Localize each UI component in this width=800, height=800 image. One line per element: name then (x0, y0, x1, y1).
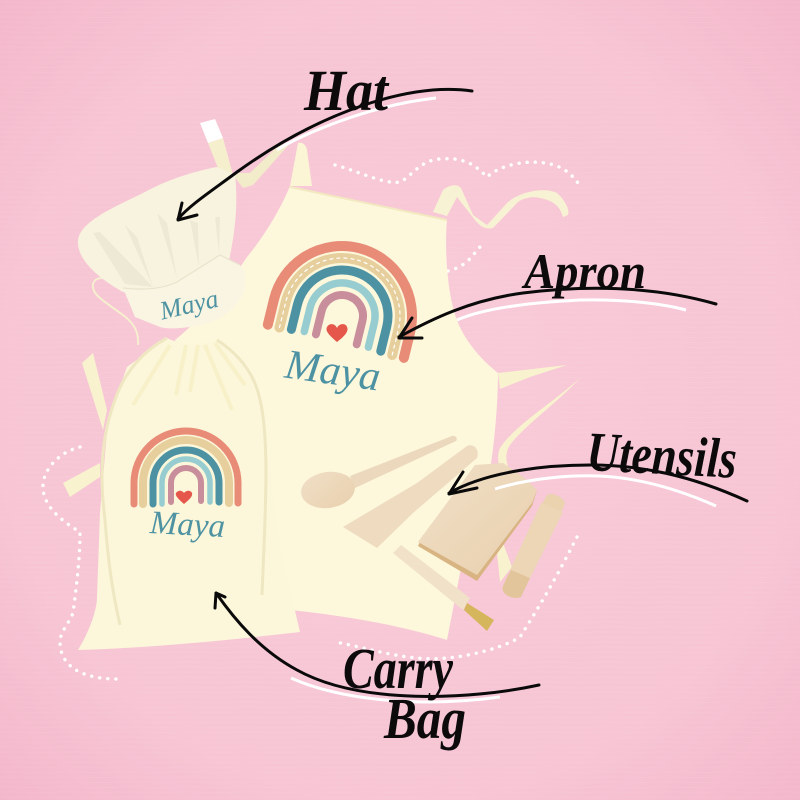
label: Hat: Hat (303, 58, 390, 123)
hat band (123, 255, 245, 328)
arrow and label: carry bag (215, 593, 539, 751)
apron lower ties (498, 365, 567, 389)
label: Bag: Bag (383, 686, 466, 751)
bag body (78, 338, 300, 650)
hat strap (93, 119, 293, 345)
dotted decorative paths (43, 159, 578, 679)
white shadow (277, 98, 436, 150)
pastry brush (393, 545, 494, 631)
bag ties (82, 353, 107, 430)
label: Carry: Carry (343, 636, 453, 701)
icon: heart (326, 324, 348, 342)
bag rainbow (134, 431, 238, 504)
apron name: Maya (281, 342, 383, 401)
arrow and label: hat (178, 58, 472, 220)
apron rainbow (268, 231, 427, 358)
apron upper tie (433, 185, 568, 229)
label: Apron: Apron (521, 243, 646, 299)
apron body (175, 186, 498, 640)
utensils (299, 436, 565, 631)
bag name: Maya (148, 505, 226, 545)
arrow and label: apron (399, 243, 716, 338)
hat puff (78, 167, 236, 300)
spatula (343, 445, 478, 548)
label: Utensils: Utensils (585, 421, 738, 491)
hat name: Maya (156, 284, 221, 326)
icon: bag heart (176, 491, 192, 504)
carry bag (63, 338, 300, 650)
hat pleats (93, 213, 220, 287)
gathered folds (133, 343, 245, 410)
scraper board (418, 463, 537, 581)
apron neck strap (290, 143, 312, 186)
arrow and label: utensils (449, 421, 747, 506)
chef hat (78, 167, 245, 328)
rolling pin (502, 494, 565, 598)
spoon (299, 436, 457, 512)
drawstrings (102, 338, 266, 625)
apron (175, 143, 580, 640)
